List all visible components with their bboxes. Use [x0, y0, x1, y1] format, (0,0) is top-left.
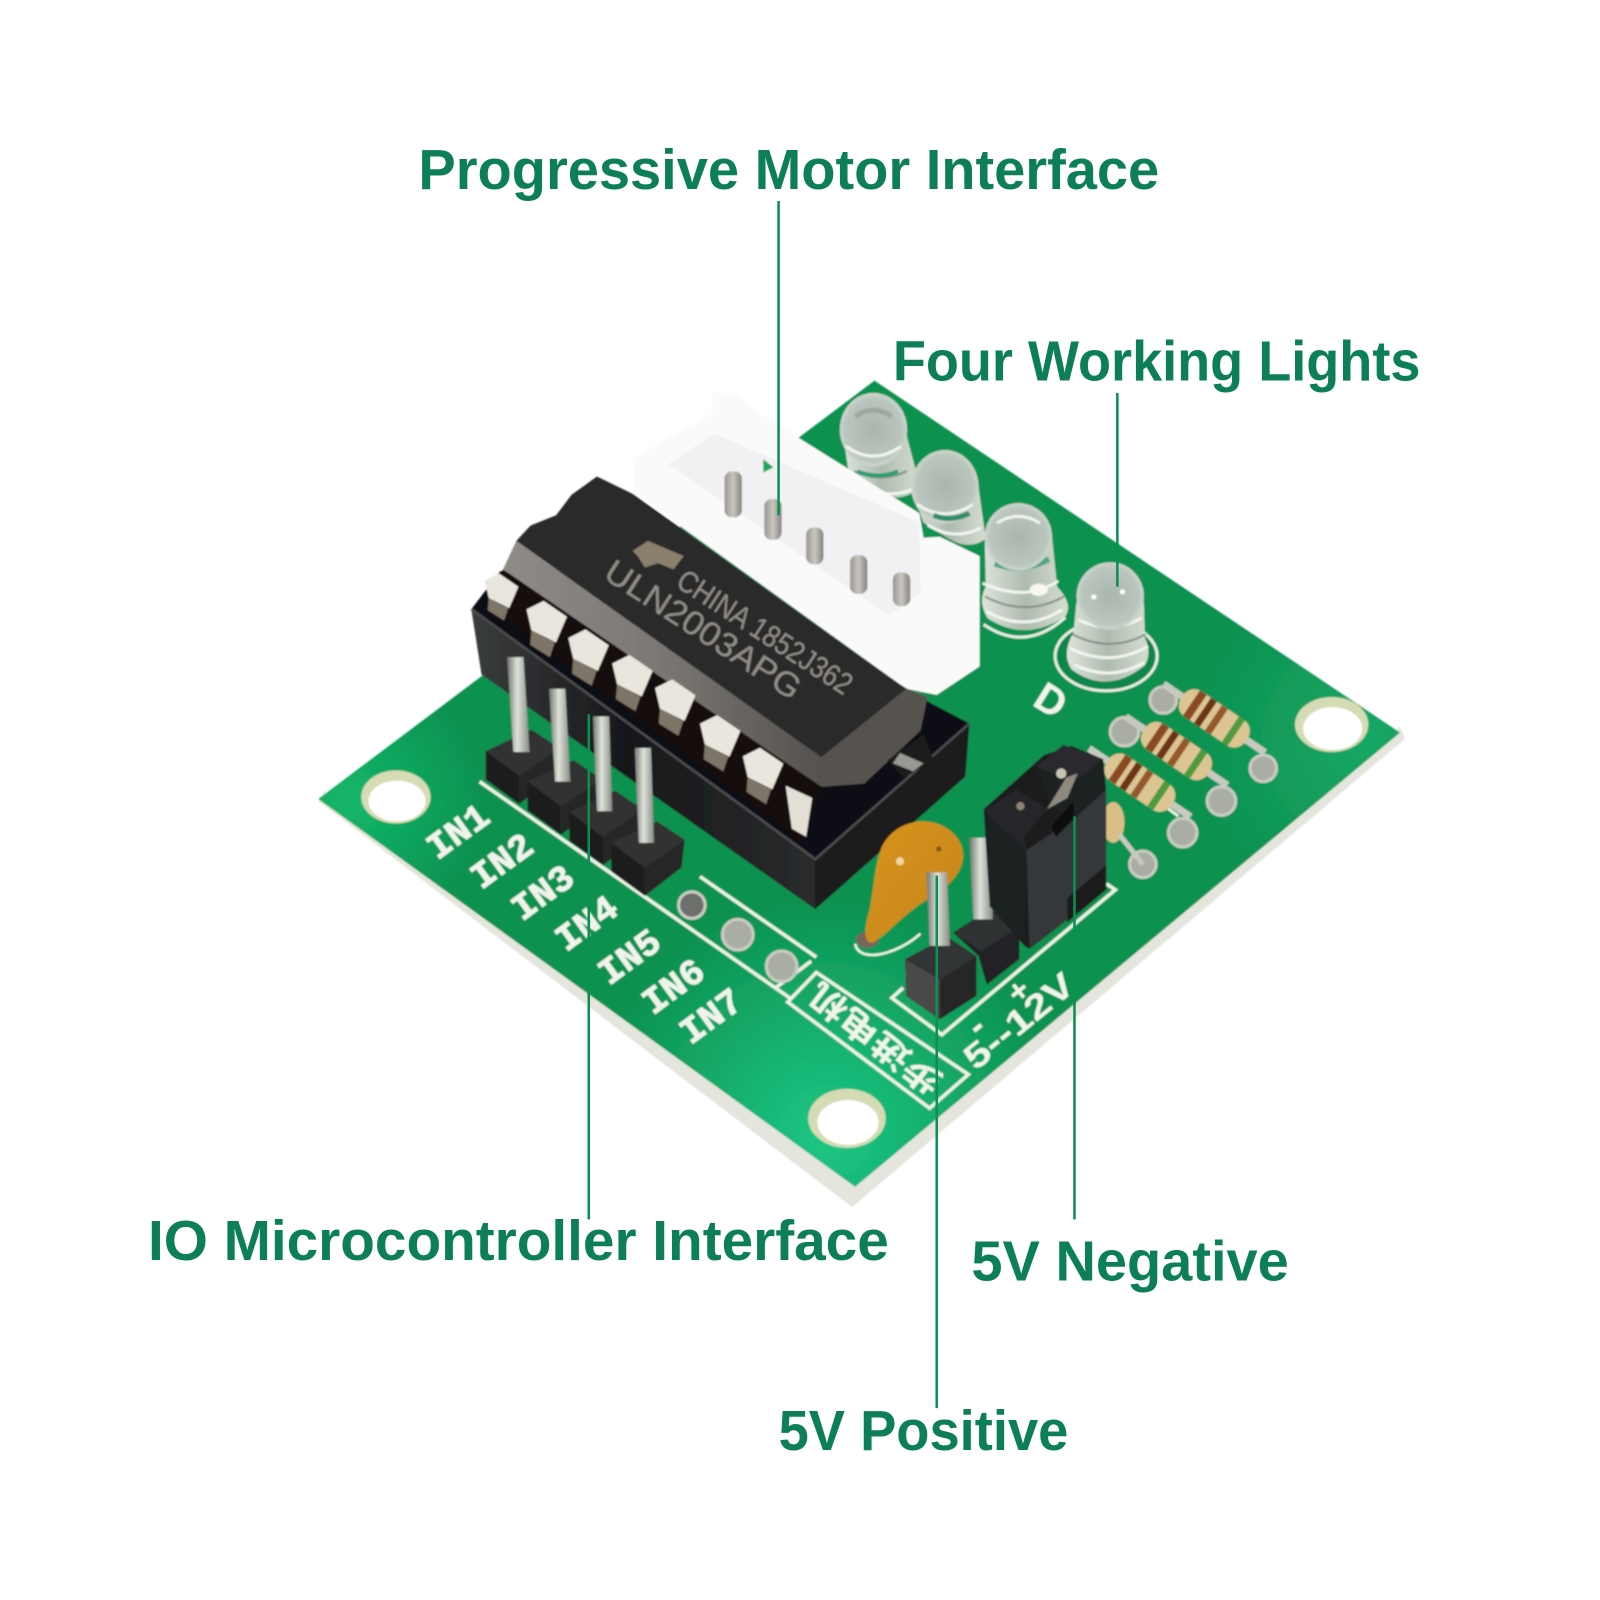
heading: 5V Positive: 5V Positive: [779, 1399, 1068, 1462]
LED 2: [911, 450, 986, 545]
heading: IO Microcontroller Interface: IO Microcontroller Interface: [148, 1209, 889, 1272]
mounting holes: [361, 697, 1368, 1148]
leader line: IO interface: [588, 714, 590, 1219]
green board face: [318, 381, 1400, 1187]
LED indicators: [840, 393, 1157, 691]
heading: Four Working Lights: Four Working Lights: [893, 330, 1420, 393]
chip markings: ULN2003APG: [598, 553, 808, 708]
heading: 5V Negative: 5V Negative: [971, 1230, 1289, 1293]
jumper: [984, 745, 1106, 949]
silkscreen voltage label: -: [958, 1006, 993, 1045]
capacitor: [856, 821, 963, 948]
board white edge: [318, 727, 1405, 1207]
solder pads: [679, 687, 1277, 982]
leader line: 5V negative: [1073, 816, 1076, 1219]
white motor connector: [633, 393, 980, 695]
silkscreen input labels: IN6: [635, 952, 714, 1025]
silkscreen voltage label: [957, 673, 1082, 1078]
heading: Progressive Motor Interface: Progressive Motor Interface: [418, 138, 1159, 201]
silkscreen input labels: IN1: [420, 797, 499, 870]
leader line: 5V positive: [935, 876, 938, 1408]
silkscreen voltage label: D: [1026, 673, 1076, 728]
silkscreen voltage label: +: [999, 970, 1037, 1011]
board highlights: [318, 381, 1400, 1187]
LED 4: [1055, 562, 1157, 691]
leader line: motor interface: [777, 201, 780, 515]
LED 3: [982, 503, 1068, 637]
leader line: lights: [1116, 393, 1119, 587]
chip pins: [485, 573, 812, 837]
silkscreen input labels: IN5: [591, 922, 670, 996]
input pin header: [486, 657, 685, 896]
circuit board photo illustration: [318, 381, 1405, 1207]
silkscreen input labels: [420, 797, 752, 1055]
power pin header: [905, 838, 1019, 1019]
silkscreen input labels: IN4: [548, 888, 628, 962]
silkscreen input labels: IN7: [673, 981, 752, 1055]
silkscreen input labels: IN2: [464, 826, 543, 900]
silkscreen voltage label: 5--12V: [957, 966, 1082, 1078]
IC socket: [471, 571, 969, 909]
silkscreen input labels: IN3: [505, 858, 584, 931]
silkscreen outlines: [480, 735, 1219, 1108]
resistors: [1080, 671, 1274, 864]
chip markings: CHINA 1852J362: [671, 563, 859, 702]
chip markings: [598, 541, 859, 708]
silkscreen motor label: 步进电机: [801, 975, 949, 1102]
IC chip ULN2003APG: [485, 477, 934, 842]
LED 1: [840, 393, 920, 498]
